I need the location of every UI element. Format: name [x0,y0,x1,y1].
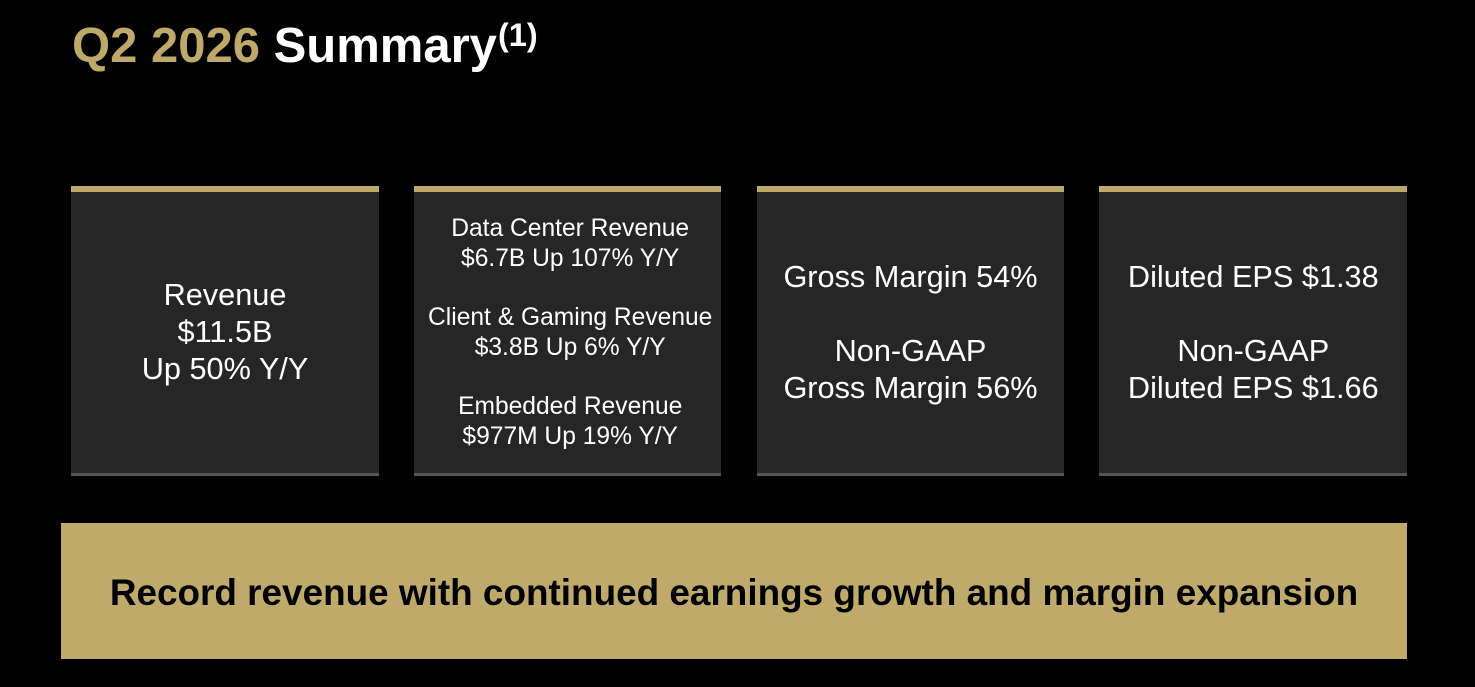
title: (1) [498,17,538,53]
panel: revenue [71,186,379,476]
client and gaming revenue: Client & Gaming Revenue [428,304,712,331]
diluted EPS text: Non-GAAP [1177,333,1329,368]
embedded revenue: Embedded Revenue [458,393,682,420]
panel: segment revenue [414,186,721,476]
client and gaming revenue [428,304,712,360]
embedded revenue: $977M Up 19% Y/Y [462,422,678,450]
data center revenue: Data Center Revenue [451,215,689,242]
gross margin text: Non-GAAP [835,333,986,368]
gross margin text [783,259,1038,405]
revenue text: Up 50% Y/Y [142,351,308,386]
revenue text: Revenue [164,277,286,312]
gross margin text: Gross Margin 56% [783,370,1038,405]
data center revenue [451,215,689,272]
diluted EPS text: Diluted EPS $1.38 [1128,259,1379,294]
client and gaming revenue: $3.8B Up 6% Y/Y [475,334,666,360]
diluted EPS text [1128,259,1379,405]
title: Q2 2026 Summary [72,19,497,73]
revenue text [142,277,308,386]
banner [61,523,1407,659]
embedded revenue [458,393,682,450]
diluted EPS text: Diluted EPS $1.66 [1128,370,1379,405]
revenue text: $11.5B [178,314,272,349]
data center revenue: $6.7B Up 107% Y/Y [461,244,679,272]
gross margin text: Gross Margin 54% [783,259,1038,294]
panel: gross margin [756,186,1064,476]
banner: Record revenue with continued earnings growth and margin expansion [110,572,1358,613]
panel: diluted EPS [1099,186,1407,476]
